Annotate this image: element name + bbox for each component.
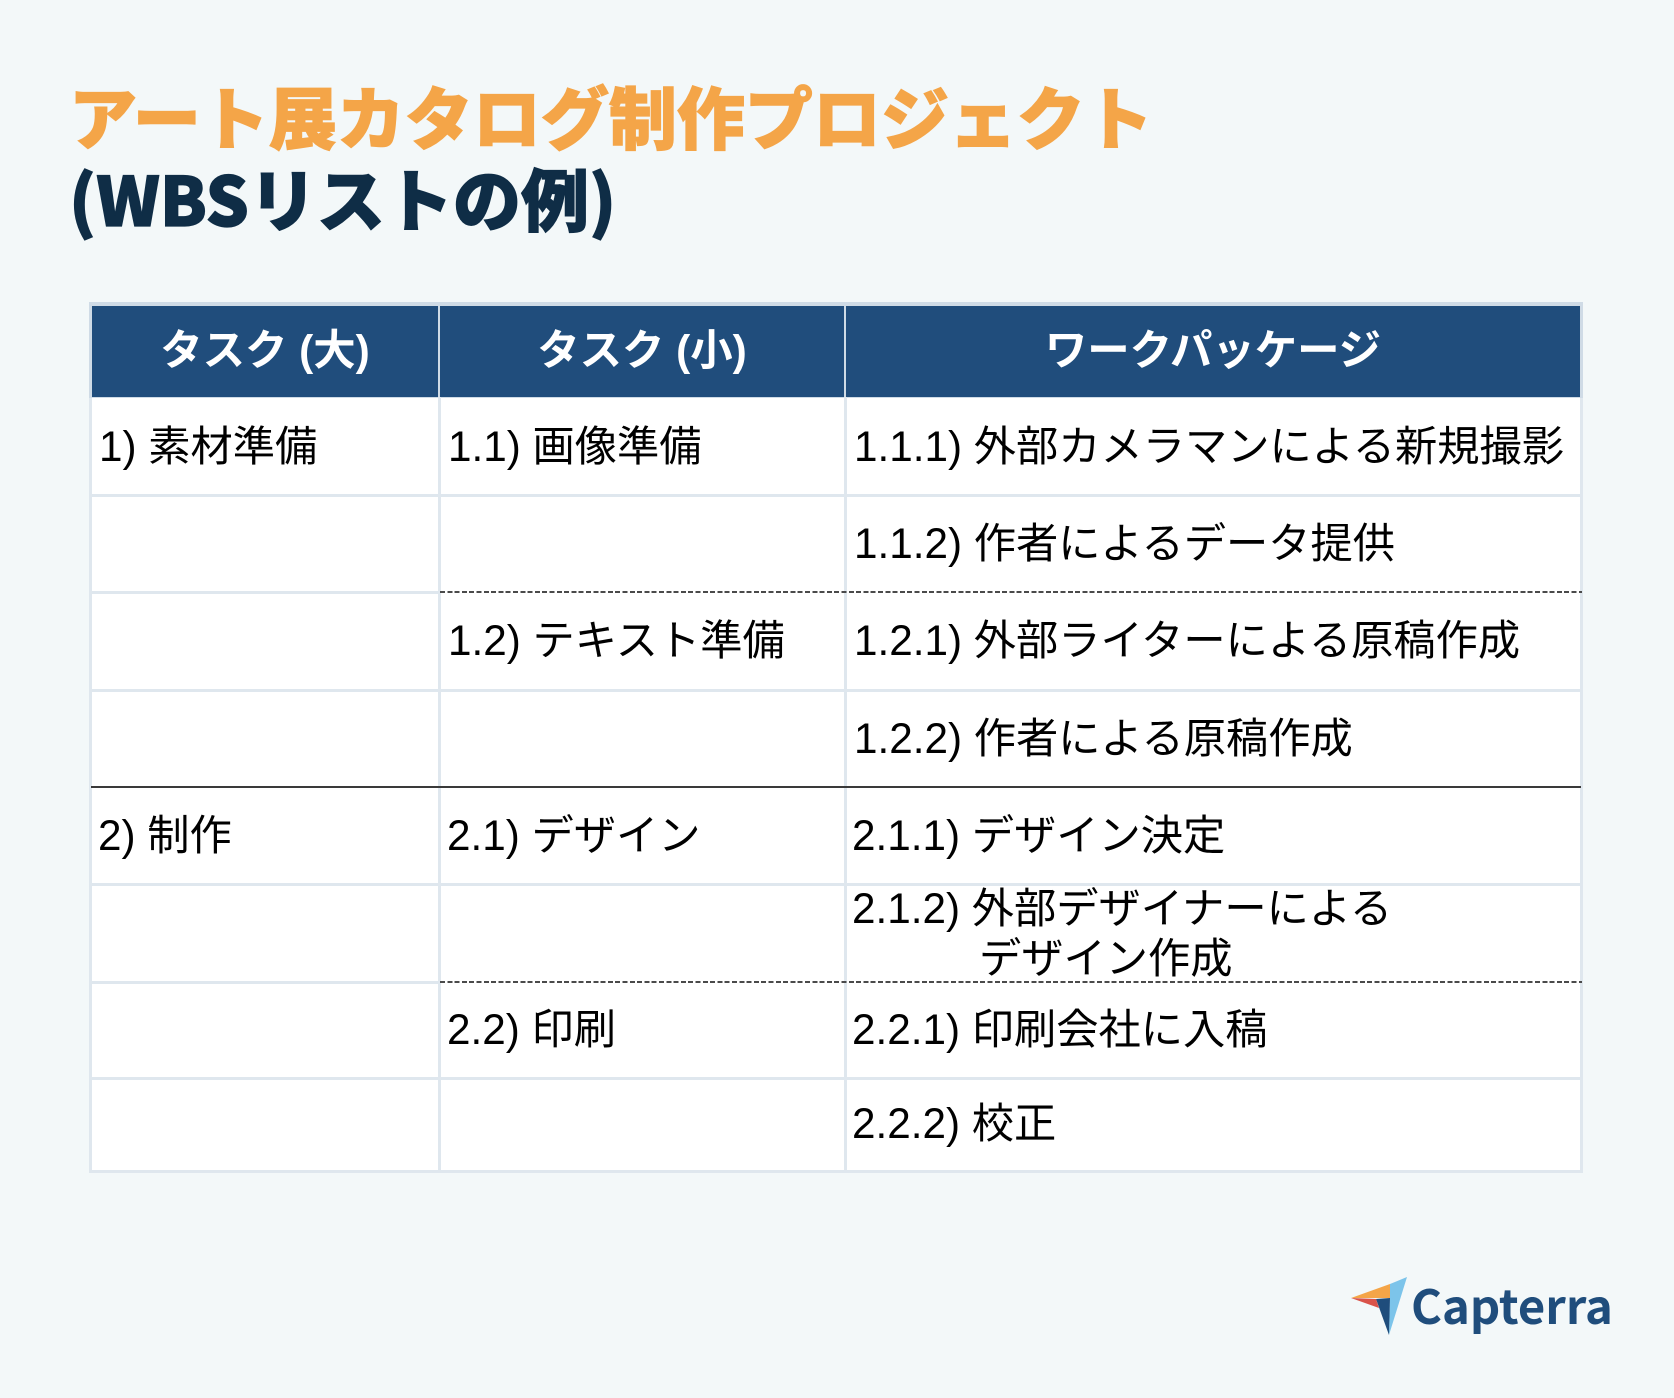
header: task large: タスク (大) [160,327,370,374]
header: task small: タスク (小) [537,327,747,374]
title line 1: アート展カタログ制作プロジェクト [69,65,1153,164]
cell: 1.2): 1.2) テキスト準備 [448,617,785,664]
header: task large [92,306,438,397]
cell: 1.1): 1.1) 画像準備 [448,423,702,470]
cell: 2.2): 2.2) 印刷 [447,1006,616,1053]
title line 2: (WBSリストの例) [69,147,616,246]
cell: 1): 1) 素材準備 [99,423,317,470]
cell: 2.1.1): 2.1.1) デザイン決定 [852,812,1225,859]
logo: Capterra [1351,1269,1613,1338]
cell: 2.2.2): 2.2.2) 校正 [852,1100,1056,1147]
cell: 2.1.2): 2.1.2) 外部デザイナーによる [852,885,1392,932]
cell: 2.1): 2.1) デザイン [447,812,701,859]
table header row [89,302,1583,398]
cell: 1.2.2): 1.2.2) 作者による原稿作成 [854,715,1353,762]
header: work package: ワークパッケージ [1045,327,1381,374]
icon: Capterra arrow [1351,1277,1407,1335]
title [69,65,1153,246]
cell: 2.1.2) [852,885,1392,982]
table [89,302,1583,1173]
cell: 1.1.2): 1.1.2) 作者によるデータ提供 [854,520,1395,567]
logo wordmark: Capterra [1411,1269,1613,1338]
cell: 2.2.1): 2.2.1) 印刷会社に入稿 [852,1006,1268,1053]
header: work package [846,306,1580,397]
cell: 1.2.1): 1.2.1) 外部ライターによる原稿作成 [854,617,1520,664]
cell: 2.1.2): デザイン作成 [979,935,1232,982]
header: task small [440,306,844,397]
cell: 1.1.1): 1.1.1) 外部カメラマンによる新規撮影 [854,423,1564,470]
cell: 2): 2) 制作 [98,812,232,859]
